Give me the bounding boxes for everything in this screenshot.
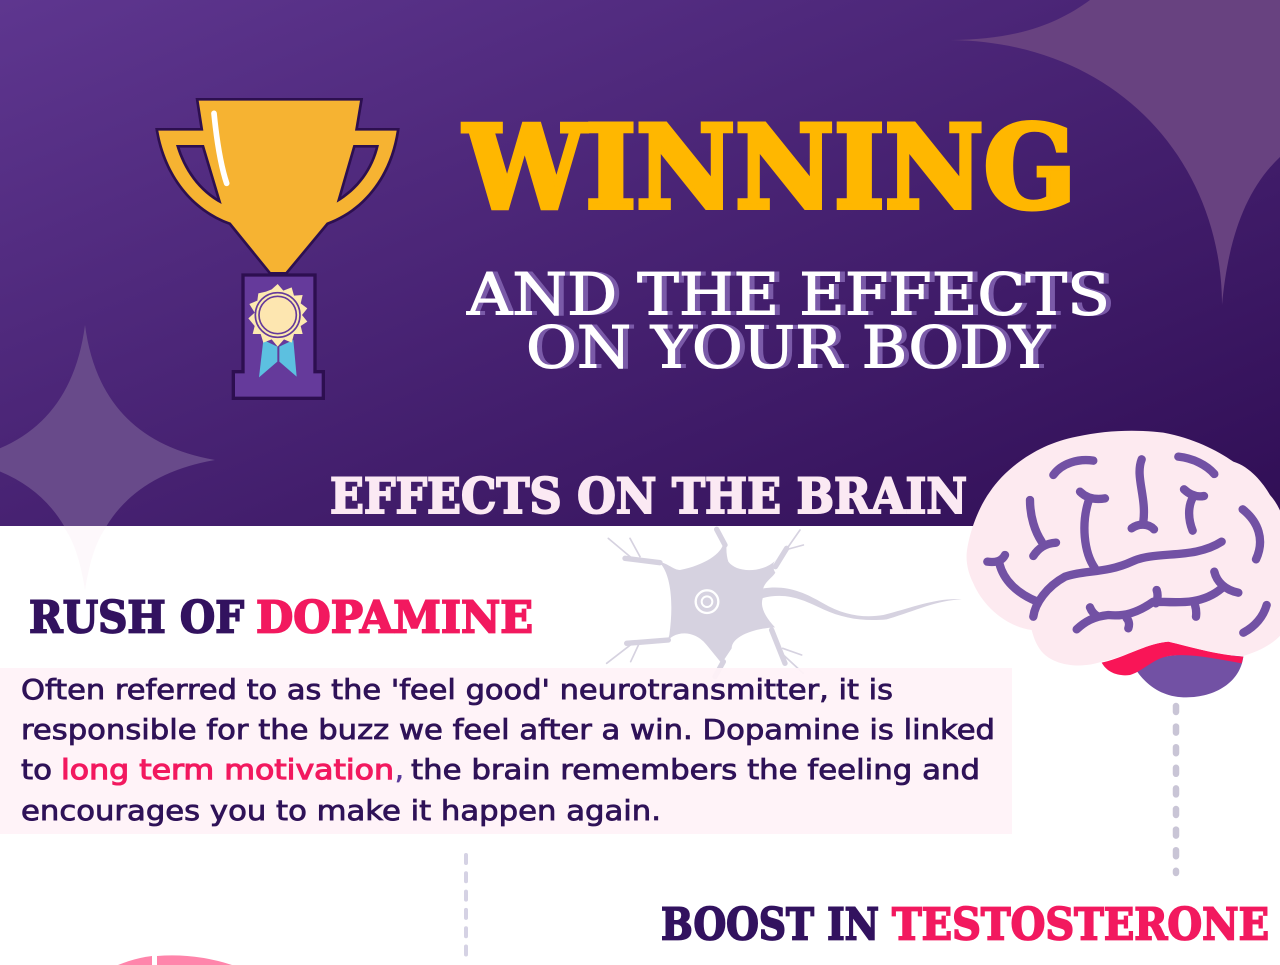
decorative star: top right	[950, 0, 1280, 305]
dotted connector: left	[464, 855, 468, 960]
cerebellum	[1135, 654, 1243, 697]
icon: trophy	[158, 101, 397, 397]
heading: rush of dopamine: DOPAMINE	[256, 592, 533, 644]
icon: pink circle (cropped)	[118, 955, 232, 965]
text block: dopamine: encourages you to make it happen again.	[21, 795, 661, 827]
brain folds	[987, 457, 1267, 633]
rosette seal	[248, 284, 307, 347]
header panel	[0, 0, 1280, 526]
icon: neuron	[607, 529, 962, 677]
text block: dopamine	[0, 668, 1012, 834]
rosette ribbon	[259, 340, 277, 377]
star fade below header	[63, 526, 107, 590]
brain body	[967, 431, 1280, 665]
brain stem band	[1102, 642, 1243, 675]
icon: brain	[967, 431, 1280, 697]
heading: boost in testosterone	[661, 900, 1269, 950]
decorative star: left	[0, 326, 214, 526]
dotted connector: brain	[1173, 706, 1179, 873]
subtitle: AND THE EFFECTS	[466, 260, 1110, 328]
text block: dopamine: Often referred to as the 'feel good' neurotransmitter, it is	[21, 674, 893, 706]
subtitle: ON YOUR BODY	[531, 314, 1056, 382]
subtitle: ON YOUR BODY	[526, 314, 1051, 382]
subtitle: AND THE EFFECTS	[471, 260, 1115, 328]
subtitle	[466, 260, 1115, 382]
title: WINNING	[463, 100, 1076, 234]
heading: rush of dopamine: RUSH OF	[29, 592, 244, 644]
trophy base	[235, 277, 322, 397]
heading: effects on the brain: EFFECTS ON THE BRAIN	[330, 467, 967, 525]
text block: dopamine: the brain remembers the feeling and	[411, 754, 980, 786]
text block: dopamine: ,	[395, 754, 404, 786]
heading: rush of dopamine	[29, 592, 533, 644]
heading: boost in testosterone: BOOST IN	[661, 900, 879, 950]
text block: dopamine: responsible for the buzz we feel after a win. Dopamine is linked	[21, 714, 995, 746]
text block: dopamine: to	[21, 754, 52, 786]
text block: dopamine: long term motivation	[61, 754, 394, 786]
